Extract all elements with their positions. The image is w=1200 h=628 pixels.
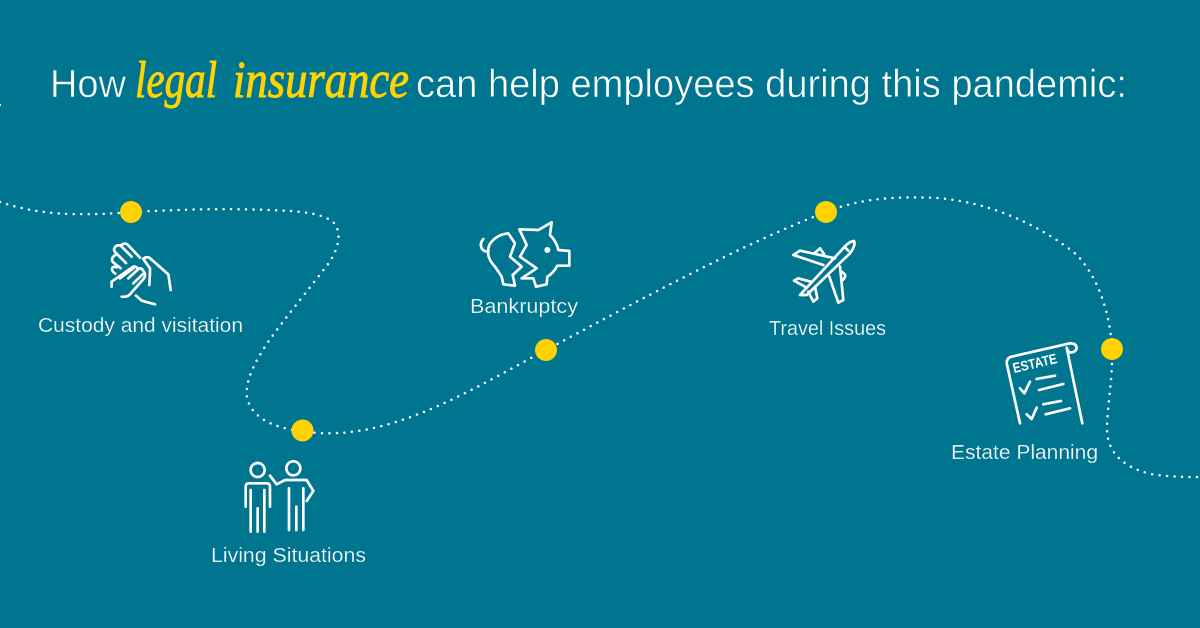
stop: living situations: [211, 461, 366, 567]
label: Travel Issues: [769, 318, 886, 340]
title: How: [50, 63, 127, 106]
title: can help employees during this pandemic:: [416, 63, 1127, 106]
stop: custody and visitation: [38, 244, 243, 337]
label: Estate Planning: [951, 442, 1098, 464]
icon: estate checklist document: [1007, 343, 1082, 423]
stop: travel issues: [769, 241, 886, 340]
icon: airplane: [793, 241, 854, 303]
label: Living Situations: [211, 545, 366, 567]
label: Bankruptcy: [470, 296, 578, 318]
yellow stop markers: [120, 201, 1123, 442]
stop: bankruptcy: [470, 222, 578, 318]
title: legal: [135, 52, 217, 109]
dotted journey path: [0, 197, 1200, 477]
stop: estate planning: [951, 343, 1098, 464]
icon: adult and child hands: [112, 244, 171, 304]
title: insurance: [233, 52, 409, 109]
icon: two people: [246, 461, 313, 532]
icon: broken piggy bank: [481, 222, 569, 287]
title: [50, 52, 1127, 109]
small white edge mark: [0, 104, 1, 106]
label: Custody and visitation: [38, 315, 243, 337]
icon text: ESTATE: ESTATE: [1011, 350, 1059, 376]
